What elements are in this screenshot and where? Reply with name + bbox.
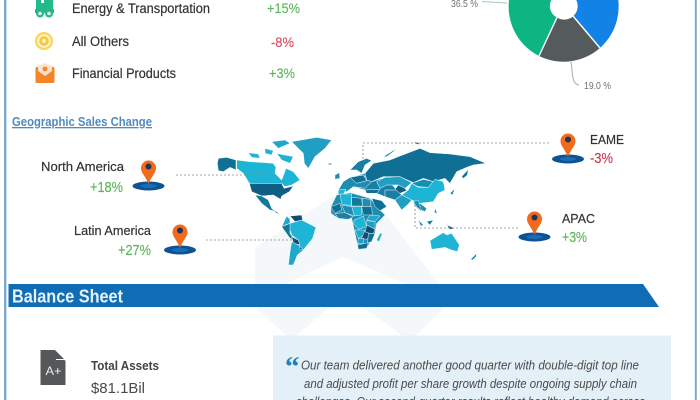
- quote panel: “: [285, 351, 300, 383]
- map: Africa and Middle East: [331, 193, 387, 249]
- banner: Balance Sheet: [8, 284, 659, 307]
- map: Americas: [217, 137, 333, 265]
- icon: Latin America pin: [164, 225, 196, 254]
- value: -8%: -8%: [271, 34, 294, 50]
- connector: EAME: [363, 143, 549, 160]
- quote panel: and adjusted profit per share growth despite ongoing supply chain: [304, 377, 637, 391]
- metric: Total Assets: [91, 358, 159, 397]
- metric: Total Assets: $81.1Bil: [91, 380, 145, 397]
- icon: APAC pin: [518, 212, 550, 242]
- label: North America: +18%: [90, 180, 123, 196]
- banner: Balance Sheet: Balance Sheet: [12, 286, 123, 306]
- icon: EAME pin: [552, 134, 584, 164]
- label: EAME: [590, 132, 624, 167]
- label: EAME: EAME: [590, 132, 624, 147]
- page frame left: [4, 0, 6, 400]
- metric: Total Assets: Total Assets: [91, 358, 159, 373]
- value: +3%: +3%: [269, 65, 295, 81]
- icon: financial envelope: [36, 63, 54, 83]
- label: Latin America: [74, 223, 152, 259]
- icon: document A+: A+: [46, 366, 62, 378]
- row label: Financial Products: Financial Products: [72, 66, 176, 81]
- row label: Energy and Transportation: Energy & Transportation: [72, 1, 210, 16]
- world map: [217, 137, 486, 265]
- callout: 19.0 percent: [571, 62, 611, 92]
- label: APAC: [562, 211, 595, 246]
- icon: target: [35, 32, 53, 50]
- icon: document A+: [40, 350, 66, 385]
- label: Latin America: +27%: [118, 243, 151, 259]
- connector: APAC: [415, 205, 518, 228]
- heading: Geographic Sales Change: Geographic Sales Change: [12, 114, 152, 129]
- row label: All Others: All Others: [72, 34, 129, 49]
- label: North America: North America: [41, 159, 125, 174]
- value: +15%: +15%: [267, 0, 300, 16]
- connector: Latin America: [206, 239, 295, 241]
- donut chart: [509, 0, 619, 62]
- callout: 19.0 percent: 19.0 %: [584, 80, 611, 92]
- label: APAC: +3%: [562, 230, 587, 246]
- label: APAC: APAC: [562, 211, 595, 226]
- label: North America: [41, 159, 125, 196]
- map: Eurasia: [335, 142, 486, 212]
- page frame right: [695, 0, 697, 400]
- callout: 36.5 percent: [451, 0, 507, 10]
- label: EAME: -3%: [590, 151, 613, 167]
- icon: North America pin: [132, 161, 164, 190]
- icon: train: [35, 0, 54, 18]
- label: Latin America: Latin America: [74, 223, 152, 238]
- background watermark: [255, 188, 445, 341]
- connector: North America: [176, 174, 268, 176]
- quote panel: Our team delivered another good quarter with double-digit top line: [301, 358, 639, 372]
- map: Asia Pacific: [413, 200, 477, 260]
- quote panel: [273, 336, 671, 400]
